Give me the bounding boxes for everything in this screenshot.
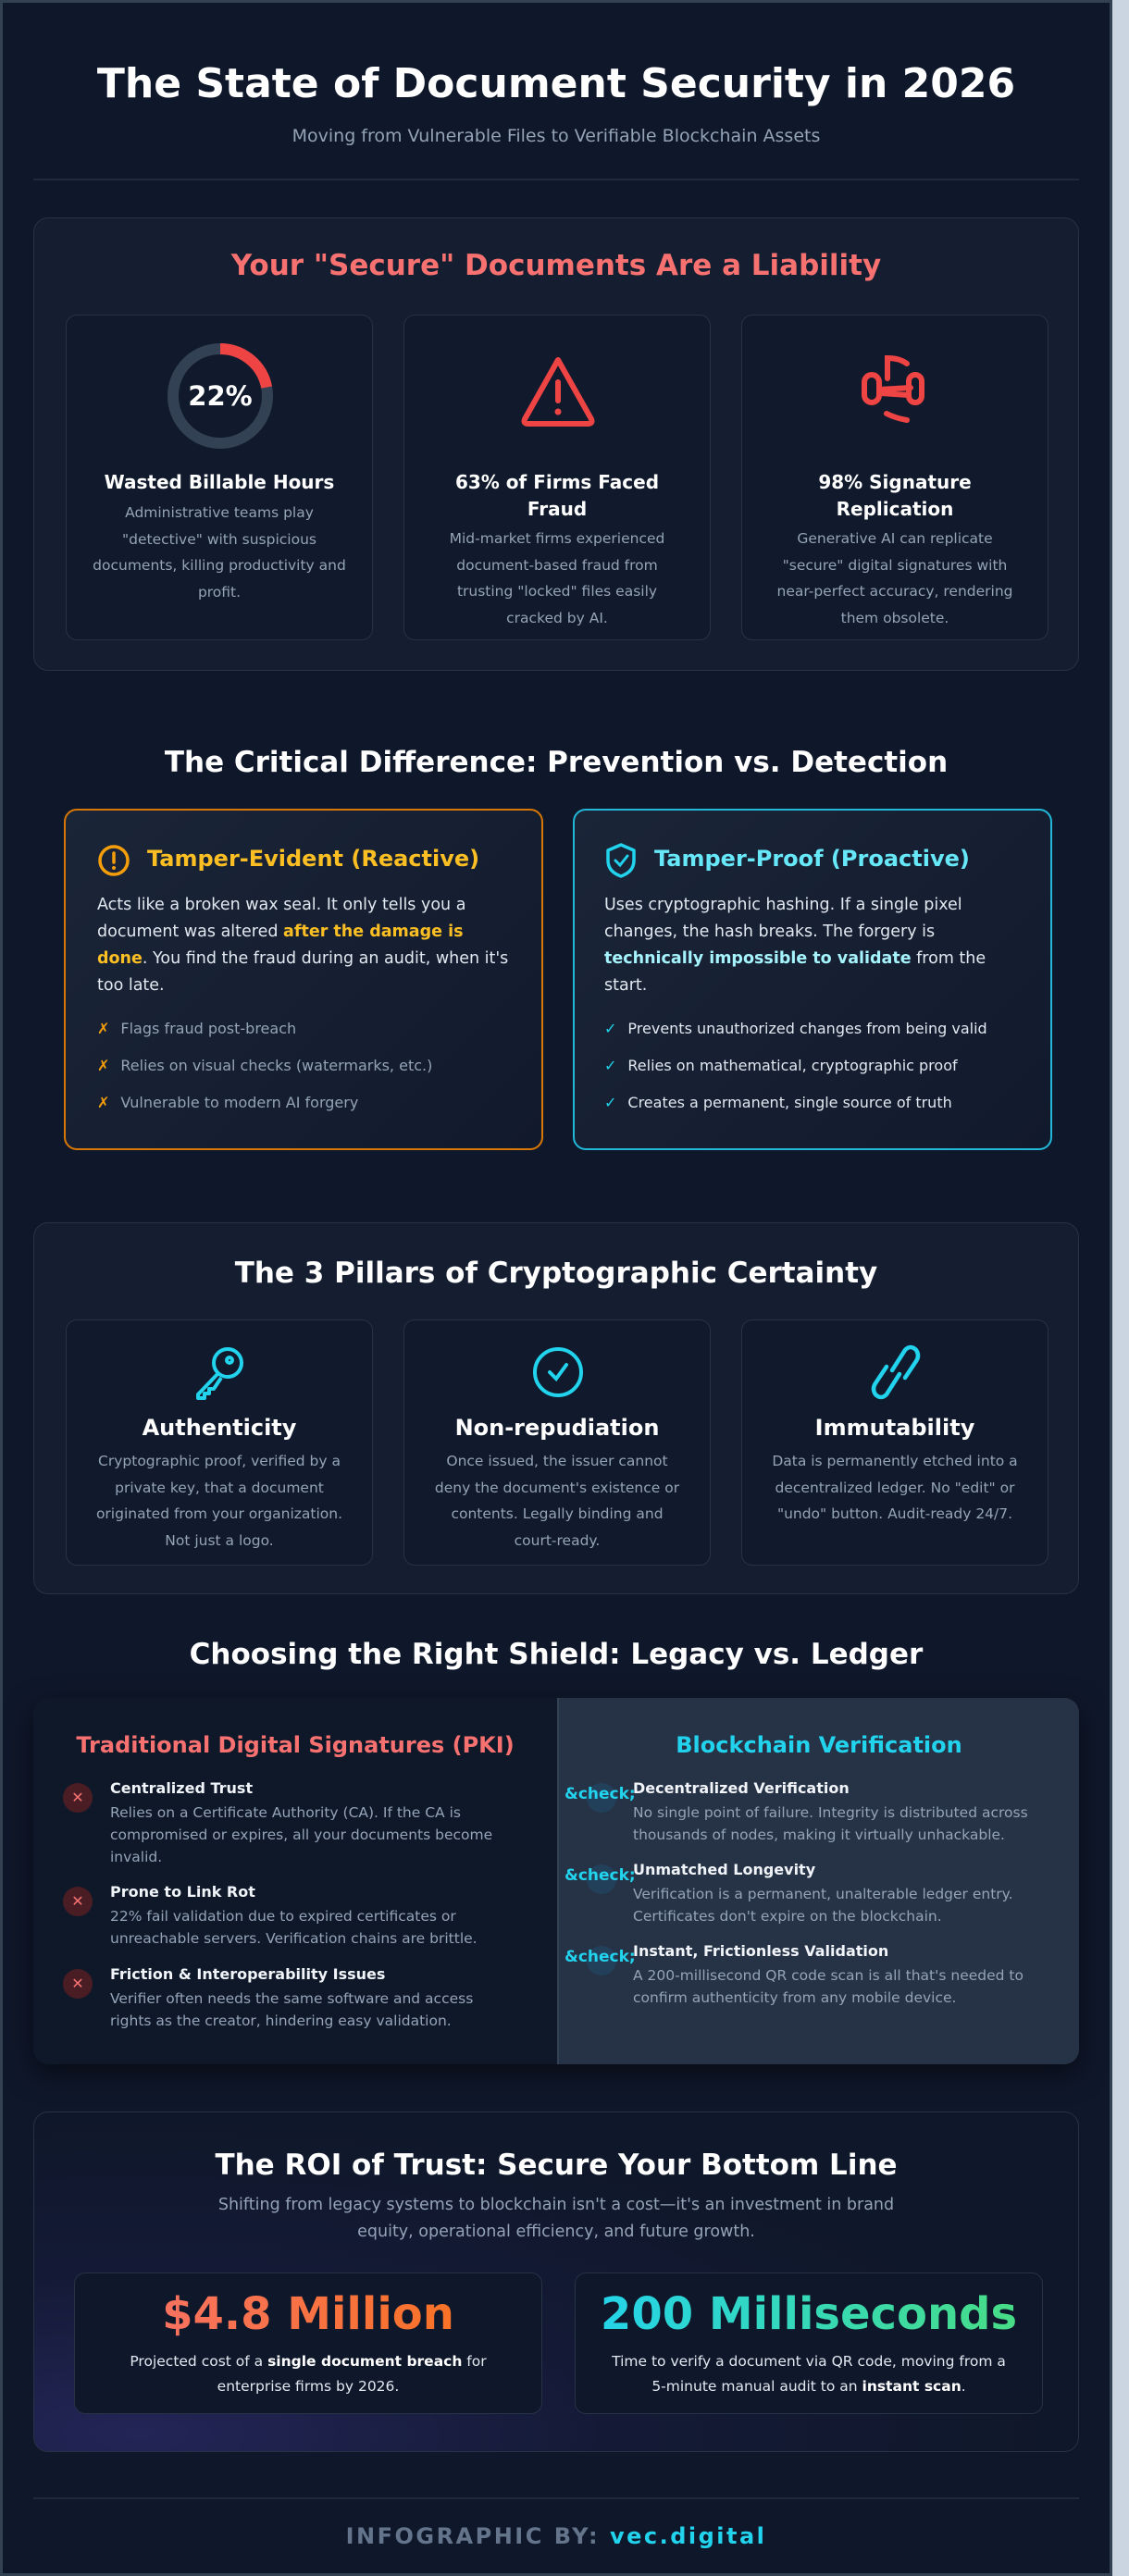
card: signature replication: 98% Signature xyxy=(818,471,972,493)
donut chart 22%: 22% xyxy=(188,380,253,412)
heading: critical difference: The Critical Difference: Prevention vs. Detection xyxy=(165,746,948,779)
card: non-repudiation: Once issued, the issuer cannot deny the document's existence or contents. Legally binding and court-ready. xyxy=(435,1453,679,1549)
item: link rot: Prone to Link Rot xyxy=(110,1883,255,1901)
item: link rot: ✕ xyxy=(71,1892,84,1910)
heading: Blockchain Verification xyxy=(676,1732,962,1758)
list xyxy=(97,1020,432,1111)
stat: $4.8 million: $4.8 Million xyxy=(162,2288,454,2340)
icon: chain link xyxy=(872,1345,920,1399)
item: longevity: Unmatched Longevity xyxy=(633,1861,815,1878)
panel: ROI xyxy=(33,2112,1079,2452)
icon: alert circle xyxy=(98,845,130,876)
panel: liability xyxy=(33,217,1079,671)
list: ✗ Vulnerable to modern AI forgery xyxy=(97,1094,358,1111)
card: non-repudiation xyxy=(403,1319,711,1566)
stat: 200 milliseconds: Time to verify a document via QR code, moving from a 5-minute manual audit to an instant scan. xyxy=(612,2353,1006,2395)
list xyxy=(604,1020,987,1111)
item: instant: A 200-millisecond QR code scan is all that's needed to confirm authenticity from any mobile device. xyxy=(633,1967,1024,2006)
card: authenticity: Authenticity xyxy=(143,1415,296,1441)
item: friction xyxy=(63,1965,473,2029)
heading: Tamper-Evident (Reactive) xyxy=(147,846,479,872)
panel: tamper-proof xyxy=(573,809,1052,1150)
stat: 200 milliseconds xyxy=(575,2273,1043,2414)
item: instant: Instant, Frictionless Validation xyxy=(633,1942,888,1960)
icon: key xyxy=(196,1347,243,1400)
card: signature replication: Generative AI can replicate "secure" digital signatures with near-perfect accuracy, rendering them obsolete. xyxy=(777,530,1012,625)
heading: The 3 Pillars of Cryptographic Certainty xyxy=(235,1257,877,1290)
card: fraud: Mid-market firms experienced document-based fraud from trusting "locked" files easily cracked by AI. xyxy=(450,530,664,625)
card: wasted hours: Administrative teams play "detective" with suspicious documents, killing productivity and profit. xyxy=(93,504,346,600)
item: friction: Friction & Interoperability Issues xyxy=(110,1965,385,1983)
subtitle: Moving from Vulnerable Files to Verifiable Blockchain Assets xyxy=(292,126,820,146)
column: PKI xyxy=(33,1698,557,2064)
list: ✓ Relies on mathematical, cryptographic proof xyxy=(604,1057,958,1074)
list: ✗ Relies on visual checks (watermarks, etc.) xyxy=(97,1057,432,1074)
item: decentralized: No single point of failure. Integrity is distributed across thousands of nodes, making it virtually unhackable. xyxy=(633,1804,1028,1843)
card: fraud: Fraud xyxy=(527,498,587,520)
card: authenticity: Cryptographic proof, verified by a private key, that a document originated from your organization. Not just a logo. xyxy=(96,1453,342,1549)
stat: 200 milliseconds: 200 Milliseconds xyxy=(601,2288,1017,2340)
item: decentralized: Decentralized Verification xyxy=(633,1779,850,1797)
footer credit: INFOGRAPHIC BY: vec.digital xyxy=(346,2523,766,2549)
item: friction: ✕ xyxy=(71,1975,84,1992)
text: Acts like a broken wax seal. It only tells you a document was altered after the damage is done. You find the fraud during an audit, when it's too late. xyxy=(97,896,508,995)
panel: 3 pillars xyxy=(33,1222,1079,1594)
item: centralized trust: Relies on a Certificate Authority (CA). If the CA is compromised or expires, all your documents become invalid. xyxy=(110,1804,492,1865)
item: centralized trust: ✕ xyxy=(71,1789,84,1806)
stat: $4.8 million xyxy=(74,2273,542,2414)
card: immutability: Data is permanently etched into a decentralized ledger. No "edit" or "undo" button. Audit-ready 24/7. xyxy=(772,1453,1018,1522)
icon: warning triangle xyxy=(522,357,594,427)
item: decentralized: &check; xyxy=(564,1785,636,1803)
card: immutability xyxy=(741,1319,1048,1566)
card: wasted hours: Wasted Billable Hours xyxy=(105,471,334,493)
title: The State of Document Security in 2026 xyxy=(97,60,1015,107)
icon: check circle xyxy=(533,1347,583,1397)
heading: Traditional Digital Signatures (PKI) xyxy=(76,1732,515,1758)
icon: shield check xyxy=(606,843,636,878)
item: longevity: &check; xyxy=(564,1866,636,1885)
item: friction: Verifier often needs the same software and access rights as the creator, hindering easy validation. xyxy=(110,1990,473,2029)
list: ✓ Creates a permanent, single source of truth xyxy=(604,1094,952,1111)
column: blockchain xyxy=(557,1698,1079,2064)
stat: $4.8 million: Projected cost of a single document breach for enterprise firms by 2026. xyxy=(130,2353,487,2395)
heading: The ROI of Trust: Secure Your Bottom Line xyxy=(215,2149,898,2182)
card: signature replication: Replication xyxy=(837,498,953,520)
card: fraud xyxy=(403,315,711,640)
item: instant xyxy=(564,1942,1024,2006)
item: decentralized xyxy=(564,1779,1028,1843)
panel: comparison xyxy=(33,1698,1079,2064)
card: fraud: 63% of Firms Faced xyxy=(455,471,659,493)
subtitle: Shifting from legacy systems to blockchain isn't a cost—it's an investment in brand equity, operational efficiency, and future growth. xyxy=(218,2196,894,2241)
card: wasted hours xyxy=(66,315,373,640)
heading: liability: Your "Secure" Documents Are a Liability xyxy=(231,249,881,282)
icon: broken signature xyxy=(862,355,924,423)
card: signature replication xyxy=(741,315,1048,640)
list: ✓ Prevents unauthorized changes from being valid xyxy=(604,1020,987,1037)
item: centralized trust xyxy=(63,1779,492,1865)
item: centralized trust: Centralized Trust xyxy=(110,1779,253,1797)
item: link rot xyxy=(63,1883,478,1947)
list: ✗ Flags fraud post-breach xyxy=(97,1020,296,1037)
card: immutability: Immutability xyxy=(815,1415,974,1441)
donut chart 22% xyxy=(167,343,273,449)
card: non-repudiation: Non-repudiation xyxy=(455,1415,659,1441)
panel: tamper-evident xyxy=(64,809,543,1150)
item: instant: &check; xyxy=(564,1948,636,1966)
item: longevity xyxy=(564,1861,1013,1925)
heading: legacy vs ledger: Choosing the Right Shield: Legacy vs. Ledger xyxy=(190,1638,923,1671)
item: link rot: 22% fail validation due to expired certificates or unreachable servers. Verification chains are brittle. xyxy=(110,1908,478,1947)
card: authenticity xyxy=(66,1319,373,1566)
item: longevity: Verification is a permanent, unalterable ledger entry. Certificates don't expire on the blockchain. xyxy=(633,1886,1013,1925)
heading: Tamper-Proof (Proactive) xyxy=(654,846,970,872)
text: Uses cryptographic hashing. If a single pixel changes, the hash breaks. The forgery is technically impossible to validate from the start. xyxy=(604,896,986,995)
